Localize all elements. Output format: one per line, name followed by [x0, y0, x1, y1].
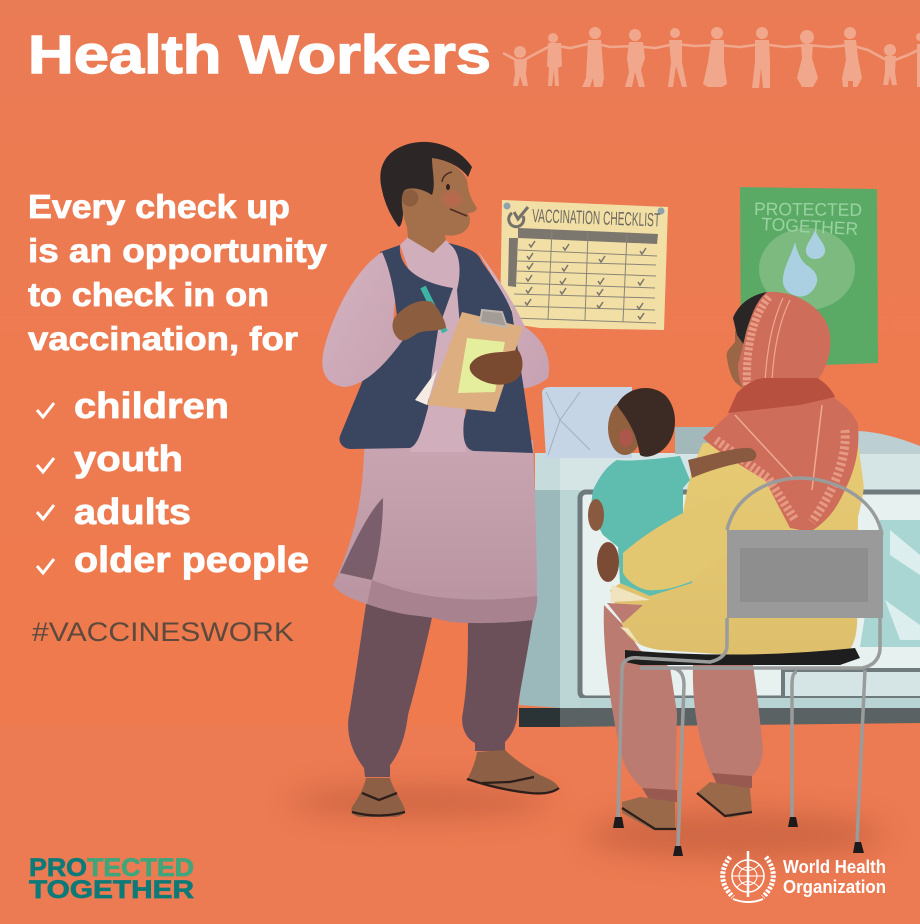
- poster: protected together: TOGETHER: [761, 214, 859, 239]
- logo: protected together: TOGETHER: [29, 876, 194, 904]
- floor: [0, 725, 920, 924]
- illustration: child: [588, 388, 756, 596]
- icon: checklist tick: [509, 207, 528, 227]
- illustration: chair: [613, 478, 883, 856]
- list labels: adults: [74, 491, 191, 532]
- poster: vaccination checklist: VACCINATION CHECKLIST: [532, 206, 661, 231]
- kurta skirt: [333, 440, 537, 623]
- logo: protected together: [29, 854, 194, 904]
- body: [610, 443, 864, 655]
- illustration: health worker: [322, 142, 559, 817]
- icon: WHO emblem: [723, 851, 773, 902]
- hands and pen: [423, 287, 445, 332]
- hashtag: #VACCINESWORK: [32, 617, 294, 647]
- poster: protected together: PROTECTED: [754, 199, 862, 220]
- headscarf: [727, 330, 745, 390]
- text: main message: is an opportunity: [28, 232, 328, 269]
- list labels: youth: [74, 438, 183, 479]
- left sleeve: [322, 252, 403, 387]
- trousers: [348, 598, 533, 777]
- text: main message: vaccination, for: [28, 320, 298, 357]
- floor shadows: [290, 786, 885, 859]
- feet and sandals: [351, 750, 558, 817]
- text: main message: to check in on: [28, 276, 269, 313]
- logo: protected together: PROTECTED: [29, 854, 194, 882]
- list labels: children: [74, 385, 229, 426]
- trousers: [604, 605, 763, 800]
- cabinet right panel: [860, 520, 920, 647]
- logo: World Health Organization: Organization: [783, 876, 886, 897]
- clipboard: [415, 310, 523, 412]
- illustration: seated mother: [604, 292, 864, 830]
- icon: check marks: [37, 403, 54, 573]
- checklist table: [508, 228, 658, 323]
- text: main message: Every check up: [28, 188, 290, 225]
- poster: vaccination checklist: [500, 200, 668, 330]
- organisation name: World Health: [783, 856, 886, 877]
- list labels: [74, 385, 309, 580]
- kurta chest: [400, 237, 466, 452]
- boxes on the counter: [542, 387, 632, 458]
- poster: protected together: [740, 187, 878, 365]
- checklist: who should be vaccinated: [37, 385, 309, 580]
- list labels: older people: [74, 539, 309, 580]
- text: main message: [28, 188, 328, 357]
- icon: water drops: [783, 230, 825, 297]
- head: [380, 142, 477, 253]
- title: Health Workers: [28, 25, 491, 85]
- icon: row of people holding hands: [503, 27, 920, 88]
- vest: [339, 243, 533, 453]
- illustration: cabinet: [519, 387, 920, 727]
- cabinet glass door: [580, 492, 920, 698]
- mother's arm around child: [623, 495, 735, 590]
- right sleeve: [477, 250, 549, 389]
- logo: World Health Organization: [723, 851, 886, 902]
